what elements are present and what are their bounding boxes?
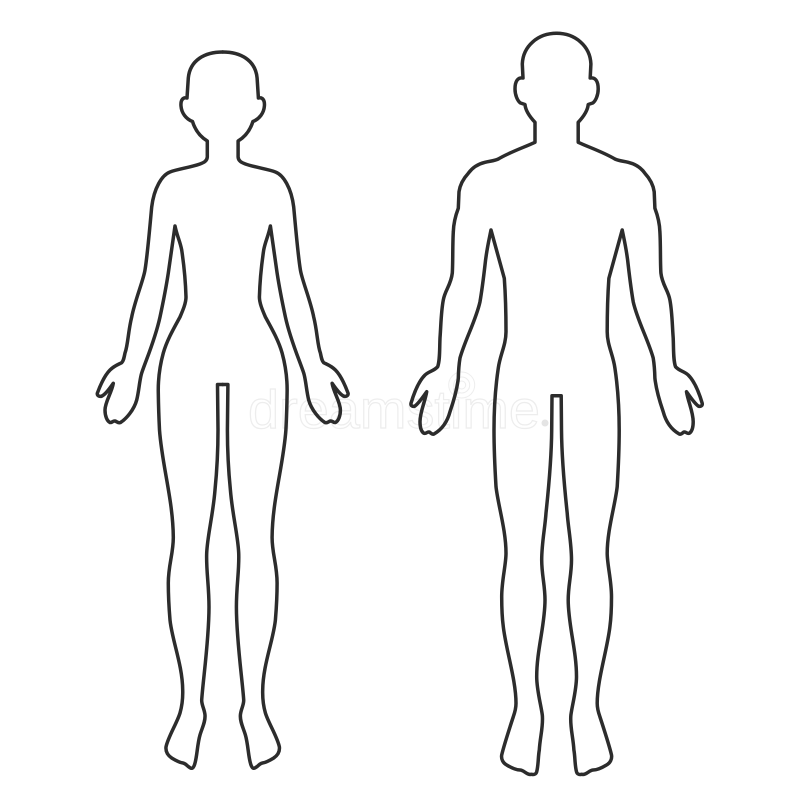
watermark: dreamstime bbox=[248, 380, 540, 440]
figure: female body outline bbox=[97, 52, 348, 768]
figure: male body outline bbox=[411, 33, 702, 775]
